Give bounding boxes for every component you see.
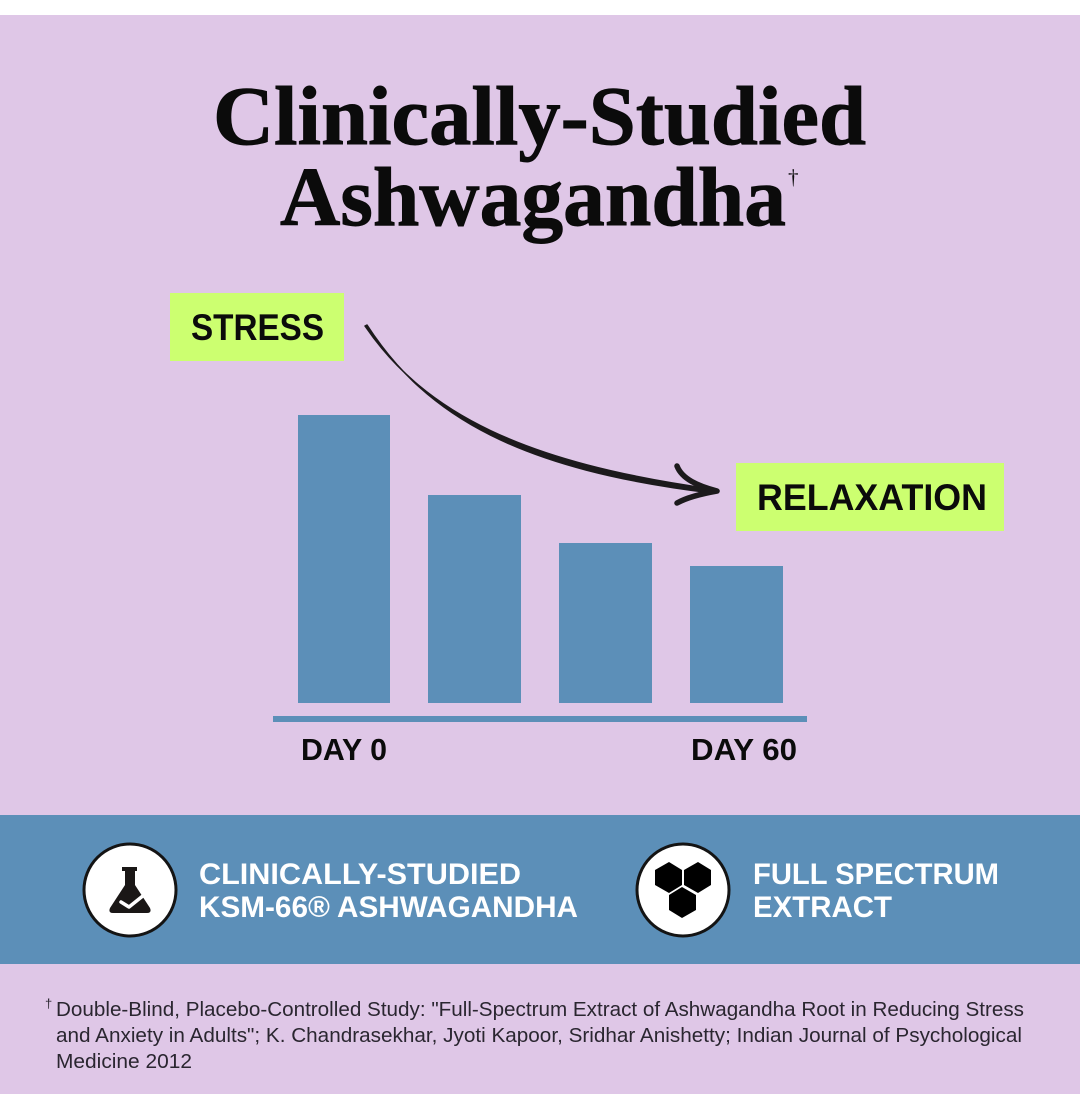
icon: three hexagons: [637, 844, 729, 936]
axis label: day 0: DAY 0: [301, 732, 387, 767]
title: [213, 70, 866, 244]
bar 1: [298, 415, 390, 703]
text: clinically-studied: KSM-66® ASHWAGANDHA: [199, 891, 578, 924]
label: relaxation: [736, 463, 1004, 531]
arrow: stress to relaxation: [365, 325, 719, 503]
text: clinically-studied: CLINICALLY-STUDIED: [199, 858, 521, 891]
footnote: †: [45, 996, 52, 1011]
text: full spectrum extract: FULL SPECTRUM: [753, 858, 999, 891]
footnote: Medicine 2012: [56, 1050, 192, 1073]
label: stress: [170, 293, 344, 361]
text: full spectrum extract: EXTRACT: [753, 891, 892, 924]
footnote: Double-Blind, Placebo-Controlled Study: "Full-Spectrum Extract of Ashwagandha Root in Reducing Stress: [56, 998, 1024, 1021]
panel: benefits band: [0, 815, 1080, 964]
bar chart: [273, 415, 807, 767]
bar 3: [559, 543, 652, 703]
title: Clinically-Studied: [213, 70, 866, 163]
bar 2: [428, 495, 521, 703]
text: full spectrum extract: [753, 858, 999, 924]
title: Ashwagandha: [280, 151, 786, 244]
axis label: day 60: DAY 60: [691, 732, 797, 767]
icon: flask with check: [84, 844, 176, 936]
title: †: [788, 165, 798, 189]
label: stress: STRESS: [191, 307, 324, 348]
footnote: and Anxiety in Adults"; K. Chandrasekhar, Jyoti Kapoor, Sridhar Anishetty; Indian Journal of Psychological: [56, 1024, 1022, 1047]
axis: [273, 716, 807, 722]
bar 4: [690, 566, 783, 703]
footnote: [45, 996, 1024, 1073]
text: clinically-studied: [199, 858, 578, 924]
label: relaxation: RELAXATION: [757, 477, 987, 518]
